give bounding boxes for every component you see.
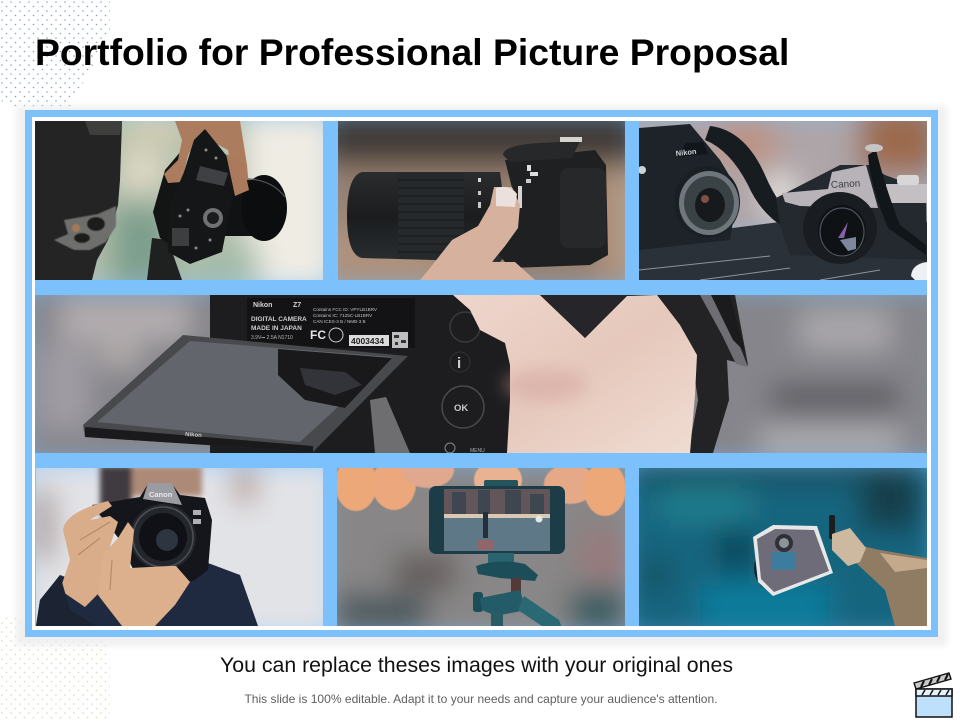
specification label area: DIGITAL CAMERA [251,316,307,323]
dark table [639,222,927,280]
orange bokeh lights [335,452,626,516]
control buttons: i [457,355,461,372]
camera body [168,129,238,264]
specification label area: MADE IN JAPAN [251,325,302,332]
lens barrel [347,172,510,262]
blurred background [320,460,640,640]
head and hair [100,466,202,516]
hand shading [503,369,587,401]
table lines [639,256,880,280]
control buttons: MENU [470,448,485,454]
camera: Canon [149,490,173,499]
photo: hand holding camera by jeans [35,121,323,280]
blurred teal water [620,460,940,640]
specification label area: 3.9V⎓ 2.5A N1710 [251,335,293,341]
footer note: This slide is 100% editable. Adapt it to your needs and capture your audience's attention. [244,692,718,706]
wrist strap [655,295,748,453]
blurred room background [639,121,927,228]
camera body [495,137,608,268]
camera back [210,295,660,453]
blurred grey background [35,295,927,453]
Canon camera: Canon [831,178,861,191]
photo: underwater camera housing [620,460,940,640]
picture frame [25,110,938,637]
camera lens [222,175,287,241]
housing shadow [754,544,798,592]
photo: person shooting with Canon [36,468,323,626]
Nikon camera: Nikon [675,147,697,158]
ripped jeans leg [35,121,122,280]
blurred warm background [338,121,625,280]
arm highlight [880,553,927,572]
flip-out screen [83,335,408,452]
specification label area: Contains FCC ID: VPYLB1BRV [313,307,378,312]
finger shadows [78,522,112,590]
hand with grip [829,515,866,566]
photo: phone on tripod with bokeh [320,452,640,640]
specification label area: FC [310,328,326,342]
specification label area: Contains IC: 7125C-LB1BRV [313,313,373,318]
thumb on top of camera [226,154,249,196]
control buttons: OK [454,403,468,414]
dark jacket [36,560,258,626]
right hand [98,522,190,626]
control buttons [442,312,485,454]
blurred light interior [36,468,323,626]
frame shadow [16,106,947,646]
sleeve [36,575,95,626]
dotted background: bottom left [0,610,110,720]
Canon camera [776,144,928,264]
photo: telephoto camera in hand [338,121,625,280]
specification label area [247,298,415,348]
specification label area: CAN ICES-3 B / NMB-3 B [313,319,366,324]
hand and thumb [420,187,535,280]
dotted background: top left [0,0,110,110]
icon: clapperboard [914,673,952,717]
camera housing [753,525,833,596]
white object in corner [911,262,927,280]
strap [147,238,182,280]
hand [453,295,697,453]
left hand [60,501,118,607]
photo: Nikon and Canon cameras on table [639,121,927,280]
blurred garden background [92,121,323,280]
smartphone [429,480,565,554]
camera strap [705,126,780,224]
specification label area: Nikon [253,302,272,309]
arm [855,546,927,626]
specification label area: Z7 [293,302,301,309]
hinge [370,397,410,453]
camera grip notch [540,295,627,338]
specification label area: 4003434 [351,336,384,346]
caption: You can replace theses images with your original ones [220,653,733,677]
Nikon camera [638,124,740,250]
hand [164,121,248,183]
photo: flip screen camera back in hand [35,295,927,453]
rip in jeans [54,206,116,250]
tripod head [473,553,562,630]
flip-out screen: Nikon [185,432,202,439]
title: Portfolio for Professional Picture Proposal [35,31,789,73]
camera [92,483,212,590]
